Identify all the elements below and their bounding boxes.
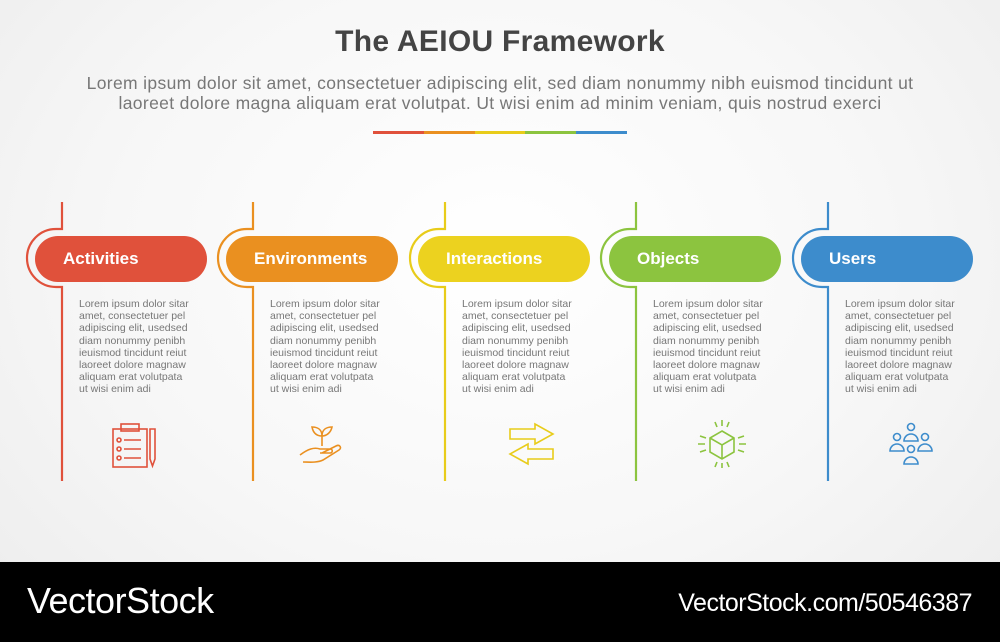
bracket: users [793, 202, 828, 481]
text: users: amet, consectetuer pel [845, 310, 951, 322]
pill: activities: Activities [63, 249, 139, 268]
text: objects: ieuismod tincidunt reiut [653, 347, 760, 359]
footer url: VectorStock.com/50546387 [678, 589, 972, 617]
pill: activities [35, 236, 207, 282]
text: objects: aliquam erat volutpata [653, 371, 756, 383]
text: objects: amet, consectetuer pel [653, 310, 759, 322]
text: objects: adipiscing elit, usedsed [653, 322, 762, 334]
text: environments: ut wisi enim adi [270, 383, 342, 395]
text: interactions: amet, consectetuer pel [462, 310, 568, 322]
text: objects: laoreet dolore magnaw [653, 359, 760, 371]
bracket: objects [601, 202, 636, 481]
text: environments: Lorem ipsum dolor sitar [270, 298, 380, 310]
text: interactions: adipiscing elit, usedsed [462, 322, 571, 334]
footer logo: VectorStock [27, 580, 214, 621]
text: interactions: ieuismod tincidunt reiut [462, 347, 569, 359]
pill: objects [609, 236, 781, 282]
text: objects: Lorem ipsum dolor sitar [653, 298, 763, 310]
text: environments: diam nonummy penibh [270, 335, 376, 347]
text: activities [79, 298, 189, 395]
text: activities: laoreet dolore magnaw [79, 359, 186, 371]
text: users: diam nonummy penibh [845, 335, 951, 347]
bracket: environments [218, 202, 253, 481]
text: activities: ut wisi enim adi [79, 383, 151, 395]
text: interactions [462, 298, 572, 395]
text: environments [270, 298, 380, 395]
subtitle: laoreet dolore magna aliquam erat volutpat. Ut wisi enim ad minim veniam, quis nostrud exerci [118, 93, 882, 113]
pill: environments: Environments [254, 249, 367, 268]
pill: objects: Objects [637, 249, 699, 268]
icon: cube [698, 420, 746, 468]
text: users: ut wisi enim adi [845, 383, 917, 395]
text: objects: diam nonummy penibh [653, 335, 759, 347]
icon: hand plant [300, 427, 340, 462]
text: environments: amet, consectetuer pel [270, 310, 376, 322]
pill: interactions: Interactions [446, 249, 542, 268]
text: environments: laoreet dolore magnaw [270, 359, 377, 371]
icon: arrows [510, 424, 553, 464]
text: interactions: diam nonummy penibh [462, 335, 568, 347]
text: activities: Lorem ipsum dolor sitar [79, 298, 189, 310]
text: environments: ieuismod tincidunt reiut [270, 347, 377, 359]
text: interactions: aliquam erat volutpata [462, 371, 565, 383]
text: objects [653, 298, 763, 395]
icon: clipboard [113, 424, 155, 467]
text: activities: adipiscing elit, usedsed [79, 322, 188, 334]
pill: users: Users [829, 249, 876, 268]
subtitle [87, 73, 913, 113]
text: users: laoreet dolore magnaw [845, 359, 952, 371]
color bar [373, 131, 627, 134]
text: interactions: laoreet dolore magnaw [462, 359, 569, 371]
text: users [845, 298, 955, 395]
text: activities: amet, consectetuer pel [79, 310, 185, 322]
title: The AEIOU Framework [335, 25, 665, 58]
footer [0, 562, 1000, 642]
text: environments: adipiscing elit, usedsed [270, 322, 379, 334]
text: users: aliquam erat volutpata [845, 371, 948, 383]
bracket: interactions [410, 202, 445, 481]
text: interactions: ut wisi enim adi [462, 383, 534, 395]
text: objects: ut wisi enim adi [653, 383, 725, 395]
text: interactions: Lorem ipsum dolor sitar [462, 298, 572, 310]
text: activities: ieuismod tincidunt reiut [79, 347, 186, 359]
text: activities: aliquam erat volutpata [79, 371, 182, 383]
icon: users [890, 424, 932, 464]
pill: environments [226, 236, 398, 282]
text: environments: aliquam erat volutpata [270, 371, 373, 383]
text: users: Lorem ipsum dolor sitar [845, 298, 955, 310]
text: users: ieuismod tincidunt reiut [845, 347, 952, 359]
bracket: activities [27, 202, 62, 481]
pill: users [801, 236, 973, 282]
text: users: adipiscing elit, usedsed [845, 322, 954, 334]
text: activities: diam nonummy penibh [79, 335, 185, 347]
subtitle: Lorem ipsum dolor sit amet, consectetuer adipiscing elit, sed diam nonummy nibh euismod tincidunt ut [87, 73, 913, 93]
pill: interactions [418, 236, 590, 282]
